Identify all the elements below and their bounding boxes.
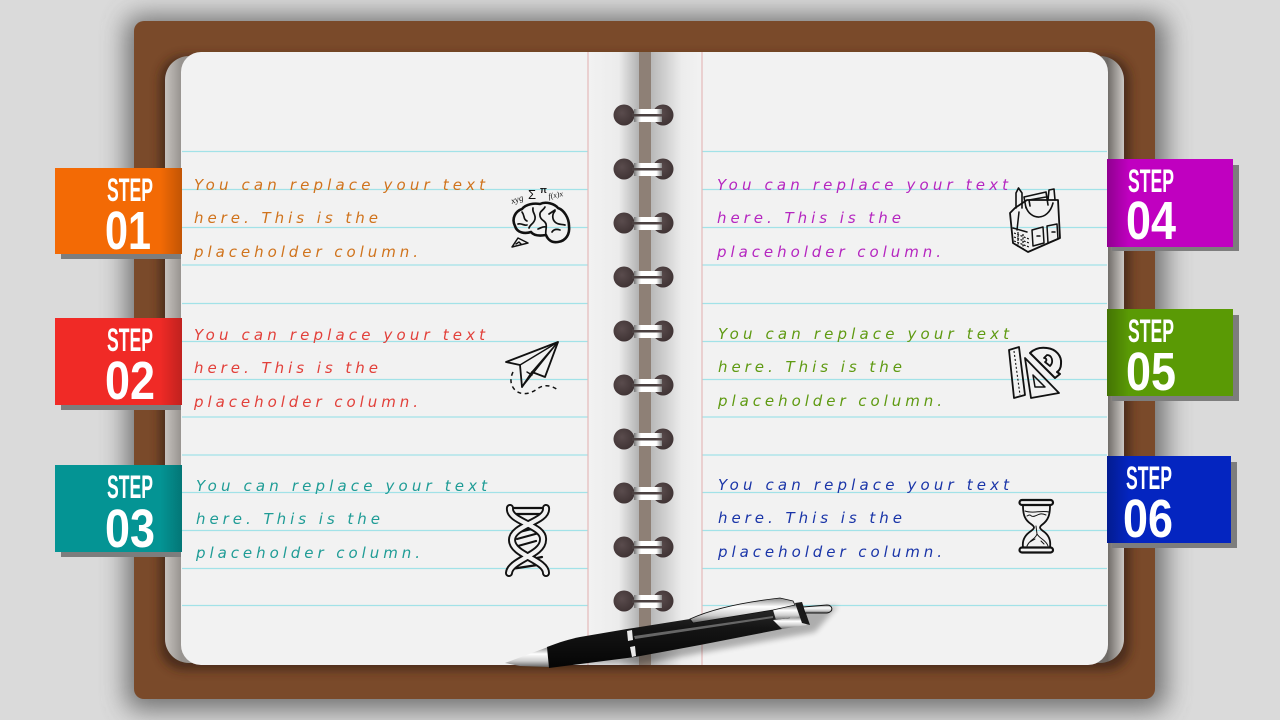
pen bands	[627, 630, 636, 657]
text block: step 04: You can replace your text	[717, 176, 1009, 194]
text block: step 06: placeholder column.	[717, 543, 942, 561]
step 03 tab: 03	[105, 499, 155, 559]
step 01 tab: 01	[105, 201, 151, 261]
text block: step 04: here. This is the	[717, 209, 901, 227]
rungs	[511, 508, 544, 569]
icon: brain: π	[540, 185, 547, 195]
icon: hourglass	[1020, 500, 1053, 552]
text block: step 02	[193, 326, 486, 411]
text block: step 04	[716, 176, 1009, 261]
icon: brain: Σ	[528, 187, 536, 202]
notebook page	[181, 52, 1108, 665]
step 01 tab	[55, 168, 182, 261]
pen collar	[795, 602, 810, 625]
step 06 tab	[1107, 456, 1237, 549]
text block: step 05: placeholder column.	[717, 392, 942, 410]
text block: step 02: placeholder column.	[193, 393, 418, 411]
icon: backpack	[1010, 188, 1060, 252]
text block: step 01: here. This is the	[194, 209, 378, 227]
pen grip and barrel	[547, 608, 790, 668]
step 01 tab: STEP	[107, 172, 153, 208]
text block: step 03: placeholder column.	[195, 544, 420, 562]
back pages	[160, 56, 1130, 670]
text block: step 06: here. This is the	[718, 509, 902, 527]
step 02 tab: STEP	[107, 322, 153, 358]
text block: step 03	[195, 477, 488, 562]
step 02 tab	[55, 318, 182, 411]
pen	[505, 598, 838, 668]
text block: step 02: You can replace your text	[194, 326, 486, 344]
text block: step 01	[193, 176, 486, 261]
text block: step 06	[717, 476, 1010, 561]
icon: dna helix	[509, 508, 546, 573]
notebook cover	[126, 16, 1166, 710]
pen barrel highlight	[634, 616, 773, 639]
step 06 tab: STEP	[1126, 460, 1172, 496]
margin lines	[588, 52, 702, 665]
spine shading	[588, 52, 702, 665]
pen upper silver section	[773, 605, 800, 620]
pen lower silver section	[773, 617, 807, 629]
text block: step 02: here. This is the	[194, 359, 378, 377]
icon: paper plane	[506, 342, 558, 394]
step 02 tab: 02	[105, 351, 155, 411]
step 04 tab: 04	[1126, 191, 1176, 251]
ruled lines	[182, 152, 1107, 606]
step 03 tab	[55, 465, 182, 559]
text block: step 04: placeholder column.	[716, 243, 941, 261]
icon: brain: f(x)x	[548, 189, 564, 201]
text block: step 05: You can replace your text	[718, 325, 1010, 343]
pen push button	[803, 605, 832, 613]
pen tip	[505, 647, 549, 667]
text block: step 05: here. This is the	[718, 358, 902, 376]
step 05 tab: 05	[1126, 342, 1176, 402]
step 06 tab: 06	[1123, 489, 1173, 549]
icon: ruler and set squares	[1009, 347, 1061, 398]
text block: step 01: placeholder column.	[193, 243, 418, 261]
spiral binding	[614, 104, 674, 612]
step 03 tab: STEP	[107, 469, 153, 505]
step 04 tab	[1107, 159, 1239, 251]
icon: brain	[509, 185, 569, 247]
text block: step 03: You can replace your text	[196, 477, 488, 495]
text block: step 03: here. This is the	[196, 510, 380, 528]
step 04 tab: STEP	[1128, 163, 1174, 199]
text block: step 05	[717, 325, 1010, 410]
step 05 tab: STEP	[1128, 313, 1174, 349]
pen clip	[690, 598, 795, 623]
text block: step 01: You can replace your text	[194, 176, 486, 194]
text block: step 06: You can replace your text	[718, 476, 1010, 494]
step 05 tab	[1107, 309, 1239, 402]
icon: brain: xyg	[509, 192, 525, 206]
pen shadow	[530, 606, 838, 664]
